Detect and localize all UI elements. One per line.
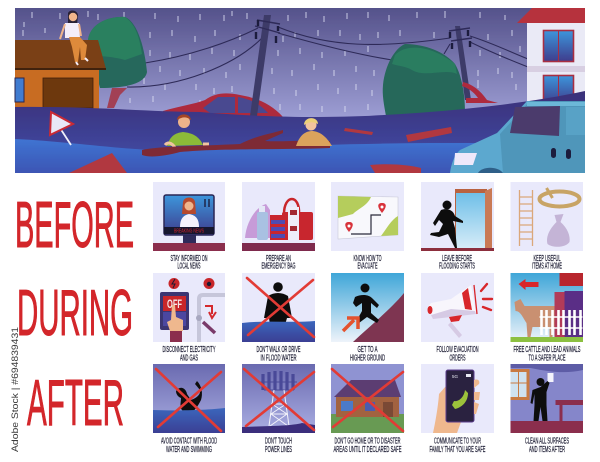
panel: avoid flood water: AVOID CONTACT WITH FLOOD [161, 436, 217, 446]
caption: AND GAS [180, 352, 198, 362]
panel: communicate with family [421, 364, 494, 454]
power pole two [449, 26, 472, 100]
caption [350, 344, 385, 362]
panel: stay informed [153, 182, 225, 270]
stormy sky [15, 8, 585, 118]
panel: keep useful items: ITEMS AT HOME [532, 260, 562, 270]
panel: communicate with family: FAMILY THAT YOU ARE SAFE [430, 444, 486, 454]
power pole one [250, 15, 280, 116]
icon: megaphone [421, 273, 494, 342]
panel: do not touch power lines [242, 364, 315, 454]
icon: evacuation map [331, 182, 404, 251]
caption: LEAVE BEFORE [442, 253, 472, 263]
flood water near [15, 139, 585, 173]
caption: AREAS UNTIL IT DECLARED SAFE [334, 444, 402, 454]
caption [161, 436, 217, 454]
icon: tv news: BREAKING NEWS [174, 228, 204, 234]
power line wires [127, 27, 528, 87]
panel: do not walk in flood water: DON'T WALK OR DRIVE [256, 344, 301, 354]
caption [525, 436, 569, 454]
caption: GET TO A [358, 344, 378, 354]
panel: do not walk in flood water [242, 273, 315, 362]
caption [430, 436, 486, 454]
caption [436, 344, 478, 362]
icon: cow leaving the farm [510, 273, 583, 342]
panel: evacuation orders: FOLLOW EVACUATION [436, 344, 478, 354]
caption: ORDERS [450, 352, 466, 362]
text: DON'T GO HOME OR TO DISASTER [334, 436, 400, 446]
caption: EVACUATE [358, 260, 378, 270]
caption [532, 253, 562, 270]
right house [517, 8, 585, 104]
icon: person running out the door [421, 182, 494, 251]
hero flood scene [15, 8, 585, 173]
panel: keep useful items: KEEP USEFUL [534, 253, 561, 263]
icon: person wading, crossed out [242, 273, 315, 342]
stock credit: Adobe Stock | #694839431 [10, 327, 21, 452]
text: AFTER [27, 366, 124, 439]
panel: emergency bag [242, 182, 315, 270]
blue van [450, 101, 585, 173]
caption [262, 253, 296, 270]
floating log [142, 130, 330, 156]
rain [23, 11, 520, 112]
floating debris [69, 127, 452, 173]
warning road sign [50, 112, 73, 145]
icon: emergency bag [242, 182, 315, 251]
second sunken red car [462, 82, 498, 103]
caption [256, 344, 301, 362]
left house [15, 40, 106, 109]
panel: do not go home [331, 364, 404, 454]
icon: off switch and gas valve: OFF [167, 297, 182, 311]
caption [439, 253, 475, 270]
panel: know how to evacuate: KNOW HOW TO [354, 253, 382, 263]
panel: disconnect electricity [153, 273, 225, 362]
icon: person climbing hill [331, 273, 404, 342]
panel: clean surfaces [510, 364, 583, 454]
icon: ladder rope and bag [510, 182, 583, 251]
panel: do not touch power lines: POWER LINES [265, 444, 292, 454]
panel: evacuation orders [421, 273, 494, 362]
panel: disconnect electricity: DISCONNECT ELECTRICITY [162, 344, 216, 354]
caption: PREPARE AN [266, 253, 291, 263]
right tree [383, 44, 465, 116]
caption [514, 344, 581, 362]
flood water far [15, 91, 585, 173]
panel: leave before flooding: FLOODING STARTS [439, 260, 475, 270]
panel: emergency bag: EMERGENCY BAG [262, 260, 296, 270]
panel: keep useful items [510, 182, 583, 270]
icon: power tower, crossed out [242, 364, 315, 433]
woman in water [296, 118, 332, 146]
icon: house, crossed out [331, 364, 404, 433]
drowned red car [163, 93, 283, 117]
panel: free cattle [510, 273, 583, 362]
panel: avoid flood water [153, 364, 225, 454]
panel: higher ground [331, 273, 404, 362]
caption [162, 344, 216, 362]
panel: stay informed: STAY INFORMED ON [170, 253, 208, 263]
caption [354, 253, 382, 270]
woman on the roof [60, 11, 88, 65]
left tree [88, 17, 147, 108]
caption: COMMUNICATE TO YOUR [434, 436, 481, 446]
caption: WATER AND SWIMMING [166, 444, 212, 454]
caption [265, 436, 292, 454]
icon: hand holding phone: 5G [452, 374, 459, 379]
text: BEFORE [15, 188, 134, 261]
man in water [165, 114, 209, 152]
caption: LOCAL NEWS [178, 260, 201, 270]
caption [170, 253, 208, 270]
panel: know how to evacuate [331, 182, 404, 270]
icon: swimmer, crossed out [153, 364, 225, 433]
caption [334, 436, 402, 454]
panel: do not touch power lines: DON'T TOUCH [265, 436, 292, 446]
caption: IN FLOOD WATER [260, 352, 296, 362]
panel: higher ground: HIGHER GROUND [350, 352, 385, 362]
icon: person cleaning wall [510, 364, 583, 433]
text: DURING [17, 276, 133, 349]
panel: leave before flooding [421, 182, 494, 270]
